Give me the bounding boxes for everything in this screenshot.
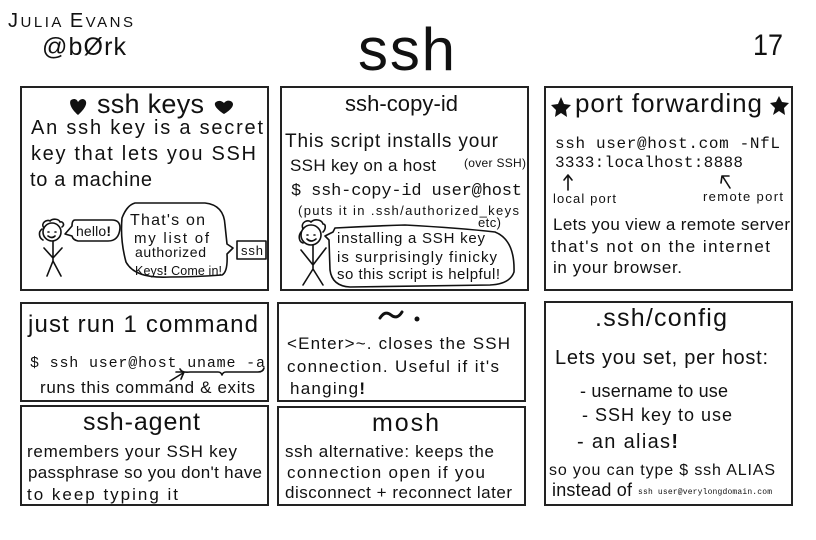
text: mosh description xyxy=(285,442,512,502)
panel: ssh-copy-id xyxy=(281,87,528,290)
text: enter tilde description: hanging! xyxy=(290,379,365,398)
text: mosh description: disconnect + reconnect later xyxy=(285,483,512,502)
text: authorized keys note: etc) xyxy=(478,215,501,230)
list: config options: - SSH key to use xyxy=(582,405,732,425)
text: port forwarding description: that's not on the internet xyxy=(551,237,770,256)
author credit: @bØrk xyxy=(42,33,126,61)
heading: ssh-agent: ssh-agent xyxy=(83,408,200,436)
list: config options xyxy=(577,381,732,453)
text: runs this command: runs this command & exits xyxy=(40,378,255,397)
heading: ssh-copy-id: ssh-copy-id xyxy=(345,91,458,116)
heading: ssh keys xyxy=(70,89,233,119)
label: local port: local port xyxy=(553,191,616,206)
text: ssh-agent description xyxy=(27,442,262,504)
text: ssh-agent description: to keep typing it xyxy=(27,485,178,504)
callout: authorized keys: authorized xyxy=(135,244,206,260)
callout: finicky: installing a SSH key xyxy=(337,230,486,247)
text: enter tilde description: <Enter>~. closes the SSH xyxy=(287,334,510,353)
text: port forwarding description: in your browser. xyxy=(553,258,682,277)
text: script description: This script installs your xyxy=(285,131,499,152)
panel: just run 1 command xyxy=(21,303,268,401)
text: ssh key definition: key that lets you SSH xyxy=(31,143,256,165)
page number: 17 xyxy=(753,29,783,62)
text: ssh-agent description: passphrase so you don't have xyxy=(28,463,262,482)
text: ssh key definition: An ssh key is a secret xyxy=(31,117,263,139)
text: per host intro: Lets you set, per host: xyxy=(555,347,768,369)
panel: ssh keys xyxy=(21,87,268,290)
text: authorized keys note xyxy=(298,203,520,230)
text: port forwarding description: Lets you view a remote server xyxy=(553,215,790,234)
command: ssh-copy-id: $ ssh-copy-id user@host xyxy=(291,182,522,201)
callout: authorized keys: Keys! Come in! xyxy=(135,264,222,278)
command: port forward: ssh user@host.com -NfL xyxy=(555,135,780,153)
text: script description xyxy=(285,131,526,175)
heading: ssh keys: ssh keys xyxy=(97,89,204,119)
text: script description: (over SSH) xyxy=(464,156,526,170)
callout: authorized keys: That's on xyxy=(130,212,205,229)
command: port forward: 3333:localhost:8888 xyxy=(555,154,743,172)
text: alias usage: ssh user@verylongdomain.com xyxy=(638,488,772,497)
text: alias usage: so you can type $ ssh ALIAS xyxy=(549,462,775,479)
panel: ssh config xyxy=(545,302,792,505)
heading: just run 1 command: just run 1 command xyxy=(27,311,258,338)
author credit xyxy=(8,10,133,61)
label box: ssh: ssh xyxy=(241,243,263,258)
list: config options: - username to use xyxy=(580,381,728,401)
heading: port forwarding: port forwarding xyxy=(575,88,762,118)
arrow: local port xyxy=(564,175,572,190)
text: script description: SSH key on a host xyxy=(290,156,436,175)
text: ssh key definition xyxy=(30,117,263,191)
text: port forwarding description xyxy=(551,215,790,277)
title: ssh xyxy=(358,16,455,83)
text: alias usage: instead of xyxy=(552,480,633,500)
icon: stick figure xyxy=(299,220,326,285)
heading: mosh: mosh xyxy=(372,409,439,437)
label box: ssh xyxy=(237,241,266,259)
brace and arrow xyxy=(170,368,264,381)
text: mosh description: ssh alternative: keeps the xyxy=(285,442,494,461)
callout: hello: hello! xyxy=(76,223,111,239)
heading: .ssh/config: .ssh/config xyxy=(595,304,727,332)
label: remote port: remote port xyxy=(703,189,783,204)
callout: finicky xyxy=(325,225,514,287)
panel: ssh-agent xyxy=(21,406,268,505)
callout: authorized keys xyxy=(122,203,233,278)
text: mosh description: connection open if you xyxy=(287,463,485,482)
callout: finicky: so this script is helpful! xyxy=(337,266,500,283)
command: ssh uname: $ ssh user@host uname -a xyxy=(30,355,265,372)
command: port forward xyxy=(555,135,780,172)
callout: authorized keys: my list of xyxy=(134,230,210,247)
callout: hello xyxy=(65,220,120,241)
text: authorized keys note: (puts it in .ssh/authorized_keys xyxy=(298,203,520,218)
arrow: remote port xyxy=(721,176,730,188)
heading: tilde dot xyxy=(380,312,420,322)
text: ssh key definition: to a machine xyxy=(30,169,152,191)
text: alias usage xyxy=(549,462,775,500)
panel: tilde dot xyxy=(278,303,525,401)
text: enter tilde description: connection. Useful if it's xyxy=(287,357,499,376)
icon: stick figure xyxy=(39,219,63,276)
text: enter tilde description xyxy=(287,334,510,398)
panel: mosh xyxy=(278,407,525,505)
author credit: JULIA EVANS xyxy=(8,10,133,32)
text: ssh-agent description: remembers your SSH key xyxy=(27,442,238,461)
callout: finicky: is surprisingly finicky xyxy=(337,249,498,266)
list: config options: - an alias! xyxy=(577,431,678,453)
panel: port forwarding xyxy=(545,87,792,290)
